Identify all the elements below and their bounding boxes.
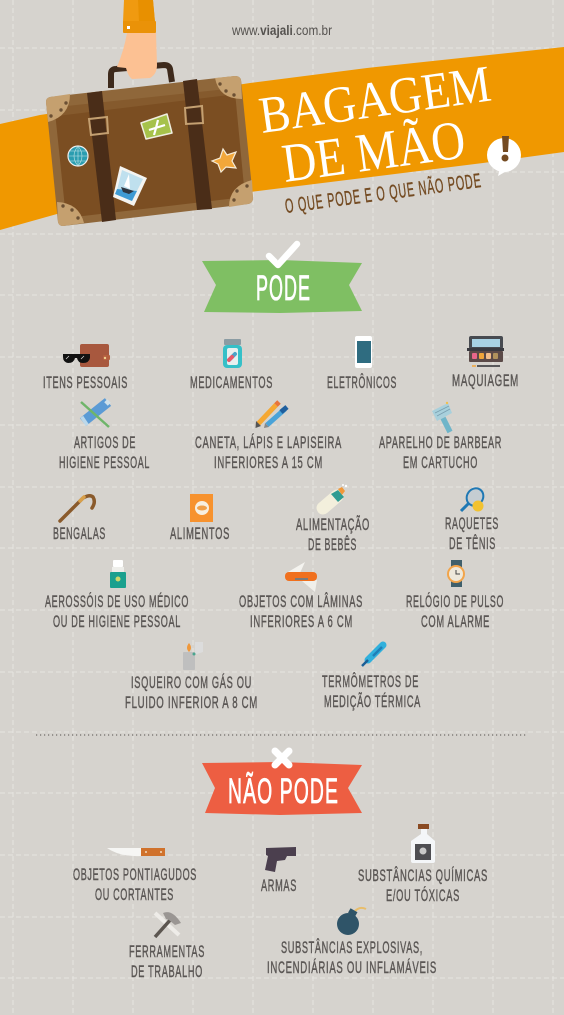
list: permitted items: OBJETOS COM LÂMINAS — [239, 592, 363, 611]
list: permitted items: COM ALARME — [421, 613, 490, 631]
list: permitted items: ISQUEIRO COM GÁS OU — [131, 673, 252, 692]
list: permitted items: MAQUIAGEM — [452, 372, 519, 390]
list: permitted items: HIGIENE PESSOAL — [59, 454, 150, 472]
icon: baby bottle — [323, 484, 347, 508]
list: prohibited items: DE TRABALHO — [131, 963, 203, 981]
list: permitted items: OU DE HIGIENE PESSOAL — [53, 613, 181, 631]
list: permitted items: DE TÊNIS — [449, 534, 496, 553]
sticker: photo — [113, 166, 147, 206]
list: permitted items: ALIMENTAÇÃO — [296, 514, 370, 534]
icon: suitcase — [46, 76, 253, 226]
list: permitted items: MEDIÇÃO TÉRMICA — [324, 691, 421, 711]
list: permitted items: INFERIORES A 15 CM — [214, 454, 323, 472]
icon: hand holding suitcase — [111, 0, 172, 88]
list: permitted items: CANETA, LÁPIS E LAPISEIRA — [195, 433, 342, 452]
list: permitted items: ELETRÔNICOS — [327, 373, 397, 392]
icon: walking cane — [60, 496, 94, 521]
icon: hammer and wrench — [155, 912, 181, 937]
icon: wallet and sunglasses — [63, 344, 110, 367]
orange header band — [0, 47, 564, 230]
list: prohibited items: FERRAMENTAS — [129, 943, 205, 961]
list: permitted items: AEROSSÓIS DE USO MÉDICO — [45, 592, 189, 611]
list: permitted items: TERMÔMETROS DE — [322, 672, 419, 691]
list: permitted items: INFERIORES A 6 CM — [250, 613, 353, 631]
corners — [46, 76, 253, 226]
icon: toothpaste and toothbrush — [81, 401, 109, 427]
website url: www.viajali.com.br — [231, 23, 332, 38]
icon: poison bottle — [411, 824, 435, 863]
list: prohibited items: E/OU TÓXICAS — [386, 886, 460, 905]
list: permitted items: EM CARTUCHO — [403, 454, 478, 472]
list: permitted items: RAQUETES — [445, 515, 499, 533]
icon: kitchen knife — [107, 848, 165, 856]
straps — [87, 79, 212, 222]
list: permitted items: ARTIGOS DE — [74, 434, 136, 452]
divider — [36, 734, 528, 736]
icon: food package — [190, 494, 213, 522]
list: prohibited items: INCENDIÁRIAS OU INFLAMÁVEIS — [267, 958, 437, 977]
icon: makeup palette — [467, 336, 504, 366]
list: permitted items: FLUIDO INFERIOR A 8 CM — [125, 694, 258, 712]
banner: nao pode — [202, 751, 362, 815]
icon: pocket knife — [285, 562, 317, 592]
list: permitted items — [43, 372, 519, 712]
icon: exclamation speech bubble — [487, 136, 521, 176]
buckles — [89, 106, 203, 135]
icon: razor — [432, 402, 452, 432]
list: permitted items: MEDICAMENTOS — [190, 374, 273, 392]
list: prohibited items — [73, 866, 488, 981]
icon: medicine bottle — [223, 339, 242, 368]
title — [256, 56, 494, 194]
icon: wristwatch — [447, 560, 465, 587]
pode heading: PODE — [256, 269, 311, 308]
icon: smartphone — [355, 336, 372, 368]
list: permitted items: ITENS PESSOAIS — [43, 374, 128, 392]
list: permitted items: DE BEBÊS — [308, 535, 357, 554]
icon: pistol — [265, 847, 296, 872]
icon: lighter — [183, 642, 203, 670]
list: permitted items: ALIMENTOS — [170, 525, 230, 543]
list: prohibited items: SUBSTÂNCIAS EXPLOSIVAS, — [281, 938, 423, 957]
icon: thermometer — [362, 645, 383, 666]
icon: pencil and pen — [256, 402, 287, 428]
icon: aerosol bottle — [110, 560, 126, 588]
icon: check mark — [269, 244, 297, 265]
sticker: globe — [68, 146, 88, 166]
icon: x mark — [275, 751, 289, 765]
sticker: plane ticket — [141, 114, 172, 139]
list: prohibited items: OBJETOS PONTIAGUDOS — [73, 866, 197, 884]
title: DE MÃO — [278, 108, 469, 194]
title: BAGAGEM — [256, 56, 494, 145]
sticker: star — [212, 149, 236, 172]
banner: pode — [202, 244, 362, 313]
list: prohibited items: OU CORTANTES — [95, 886, 174, 904]
nao pode heading: NÃO PODE — [228, 772, 339, 811]
icon: bomb — [337, 908, 366, 935]
list: prohibited items: ARMAS — [261, 877, 297, 895]
list: permitted items: BENGALAS — [53, 525, 106, 543]
icon: tennis racket and ball — [461, 485, 487, 512]
